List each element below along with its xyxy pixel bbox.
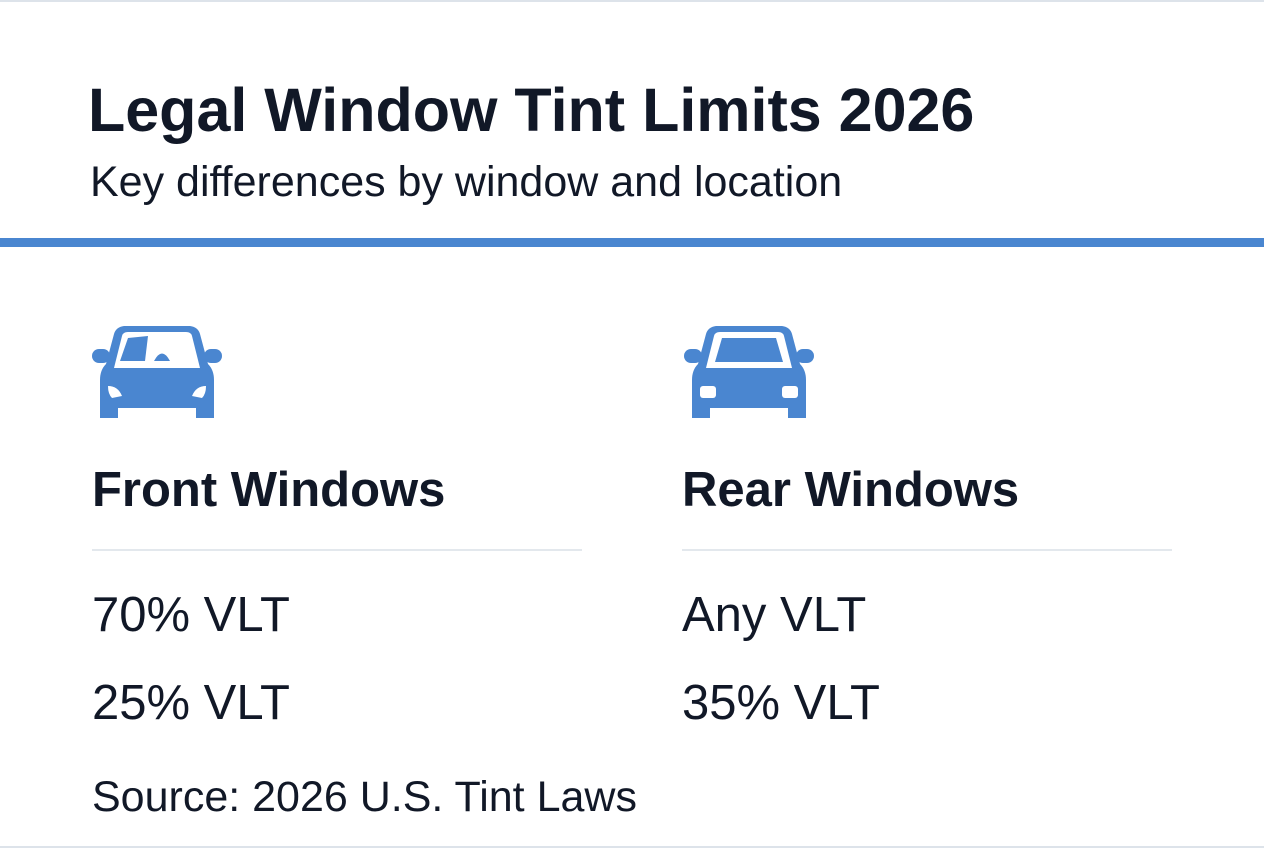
- title: Legal Window Tint Limits 2026: [88, 76, 974, 144]
- value: 35% VLT: 35% VLT: [682, 676, 880, 730]
- subtitle: Key differences by window and location: [90, 158, 842, 206]
- value: 25% VLT: 25% VLT: [92, 676, 290, 730]
- icon: front car: [92, 326, 222, 418]
- value: 70% VLT: 70% VLT: [92, 588, 290, 642]
- panel: rear windows: [682, 463, 1172, 730]
- panel: front windows: [92, 463, 582, 730]
- heading: front windows: Front Windows: [92, 463, 445, 517]
- header rule: [0, 238, 1264, 247]
- value: Any VLT: Any VLT: [682, 588, 866, 642]
- heading: rear windows: Rear Windows: [682, 463, 1019, 517]
- icon: rear car: [684, 326, 814, 418]
- source note: Source: 2026 U.S. Tint Laws: [92, 773, 637, 821]
